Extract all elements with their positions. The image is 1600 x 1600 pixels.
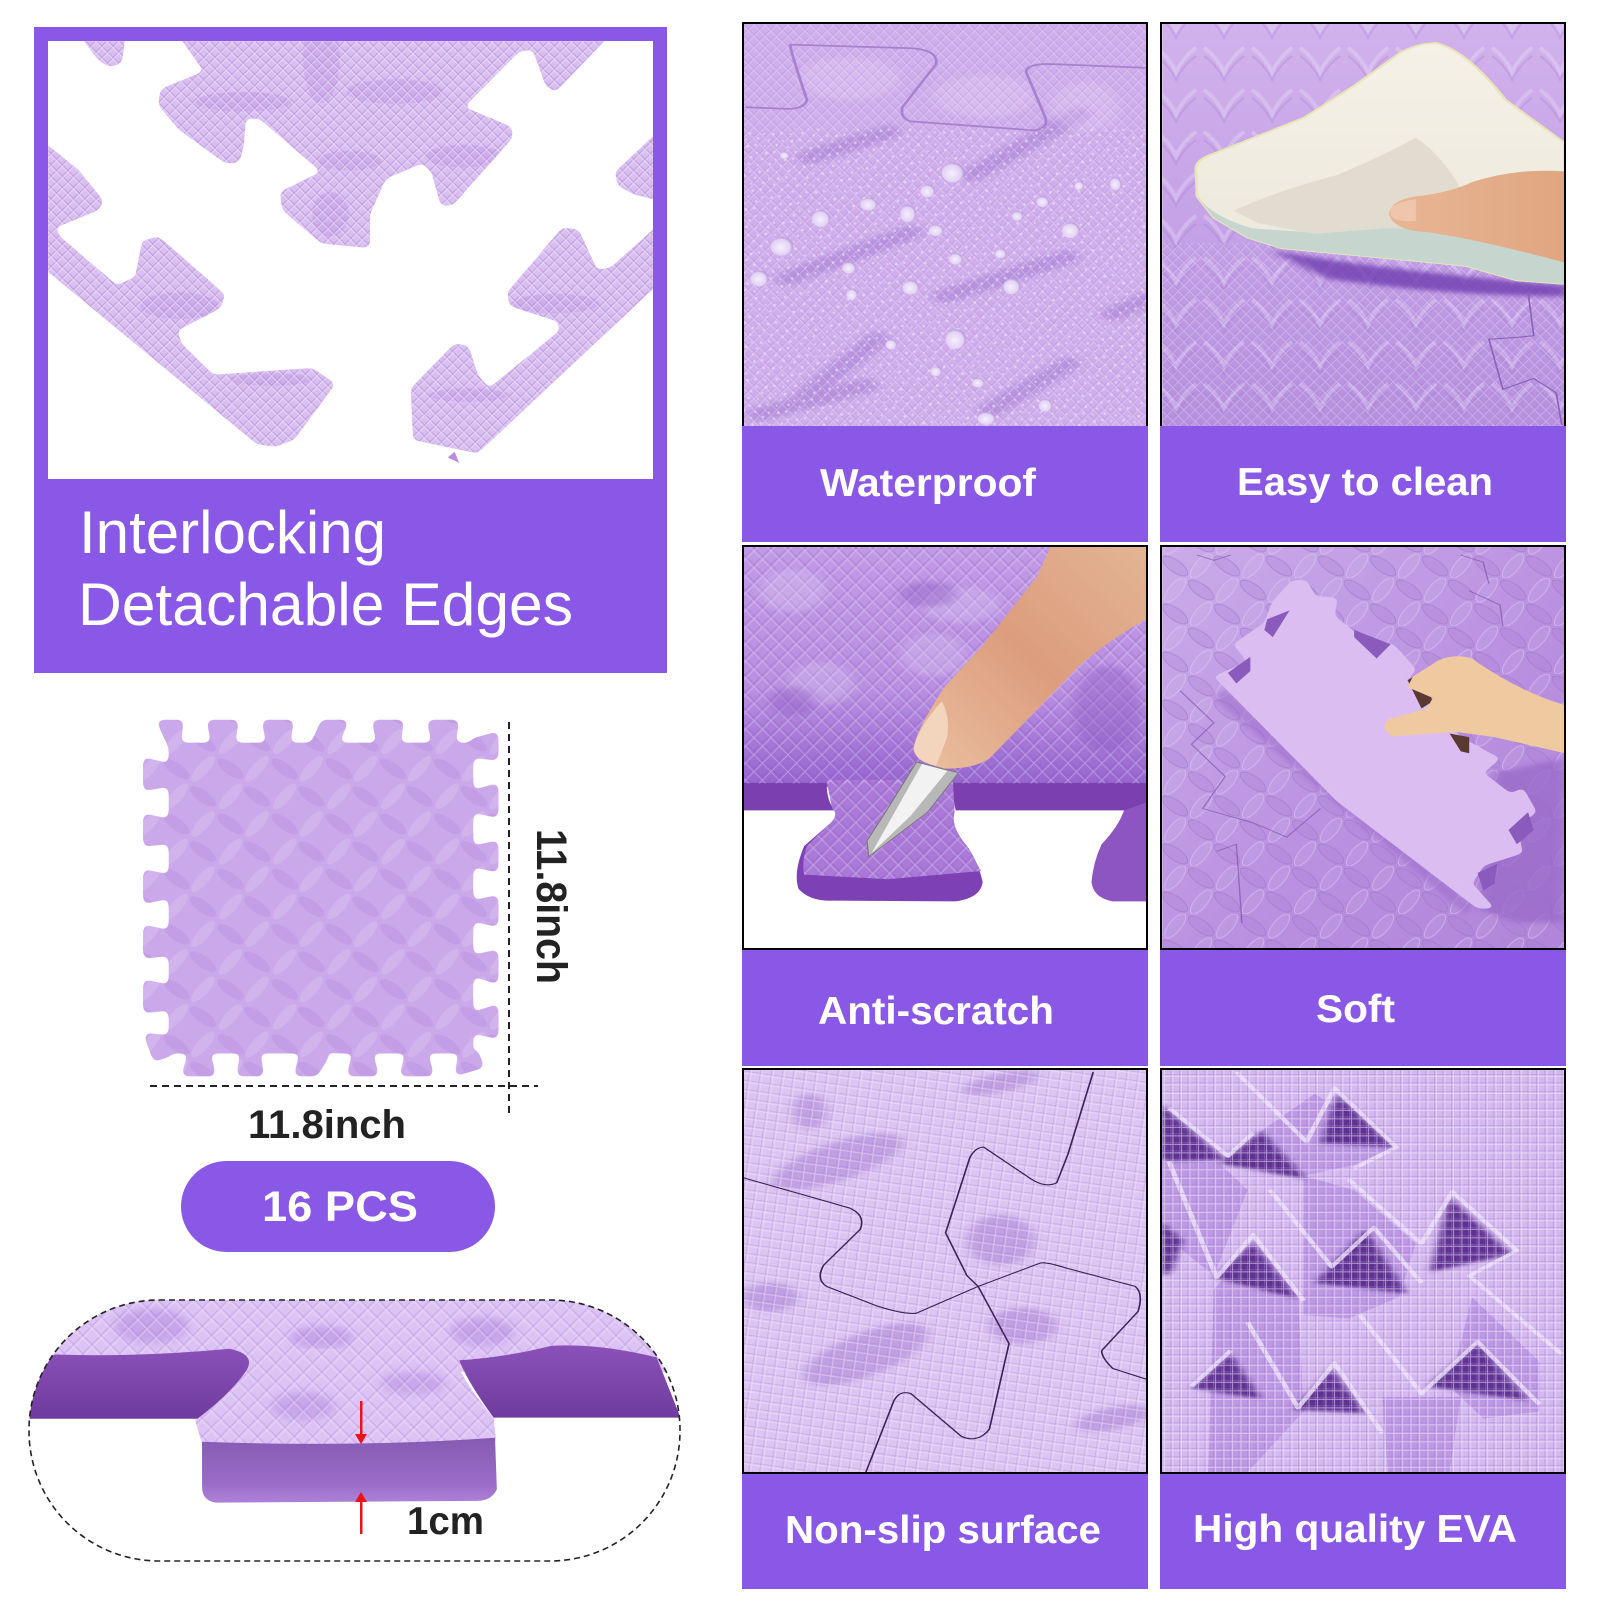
- panel: high quality EVA: [1160, 1067, 1568, 1589]
- photo: water droplets on mat: [742, 21, 1149, 429]
- thickness detail oval: [18, 1300, 698, 1561]
- arrow: up: [355, 1492, 367, 1534]
- blade: [867, 762, 959, 857]
- caption bar: High quality EVA: [1193, 1508, 1517, 1551]
- thickness label: 1cm: [407, 1500, 484, 1543]
- photo: foam mat tile top view: [138, 711, 505, 1085]
- badge: 16 pcs: 16 PCS: [262, 1183, 418, 1231]
- dimension label: width: 11.8inch: [248, 1103, 406, 1147]
- photo: close-up of interlocked surface: [742, 1066, 1156, 1474]
- caption bar: Anti-scratch: [818, 990, 1054, 1033]
- lifted foam tile: [1214, 580, 1537, 909]
- photo: stacked interlocking tiles: [1161, 1067, 1568, 1474]
- foam edge photo: [18, 1300, 698, 1503]
- dimension lines: [150, 722, 538, 1113]
- caption bar: [1160, 1474, 1566, 1589]
- caption bar: [1160, 426, 1566, 542]
- arrow: down: [355, 1401, 367, 1444]
- caption bar: Easy to clean: [1237, 461, 1493, 504]
- towel: [1196, 43, 1565, 284]
- caption bar: [1160, 950, 1566, 1066]
- caption bar: Waterproof: [820, 462, 1037, 505]
- dimension label: height: 11.8inch: [527, 829, 575, 984]
- caption bar: [742, 950, 1148, 1066]
- panel: interlocking detachable edges: [34, 13, 667, 673]
- panel: non-slip surface: [742, 1066, 1156, 1589]
- caption bar: Soft: [1316, 988, 1395, 1031]
- heading: interlocking detachable edges: [78, 499, 573, 638]
- hand: [1389, 171, 1565, 262]
- panel: waterproof: [742, 21, 1149, 542]
- hand: [1385, 656, 1565, 753]
- caption bar: [742, 1474, 1148, 1589]
- caption bar: Non-slip surface: [785, 1509, 1101, 1552]
- heading: interlocking detachable edges: Interlocking: [79, 499, 386, 566]
- caption bar: [742, 426, 1148, 542]
- photo: interlocking foam edges on white: [48, 41, 653, 463]
- photo: towel wiping mat: [1161, 21, 1568, 429]
- badge: 16 pcs: [181, 1161, 495, 1252]
- heading: interlocking detachable edges: Detachable Edges: [78, 571, 573, 638]
- panel: soft: [1160, 544, 1568, 1066]
- photo: knife against foam tab: [744, 547, 1146, 902]
- photo: hand bending a foam tile: [1161, 544, 1568, 950]
- panel: easy to clean: [1160, 21, 1568, 542]
- finger: [914, 546, 1147, 769]
- panel: anti-scratch: [742, 544, 1149, 1066]
